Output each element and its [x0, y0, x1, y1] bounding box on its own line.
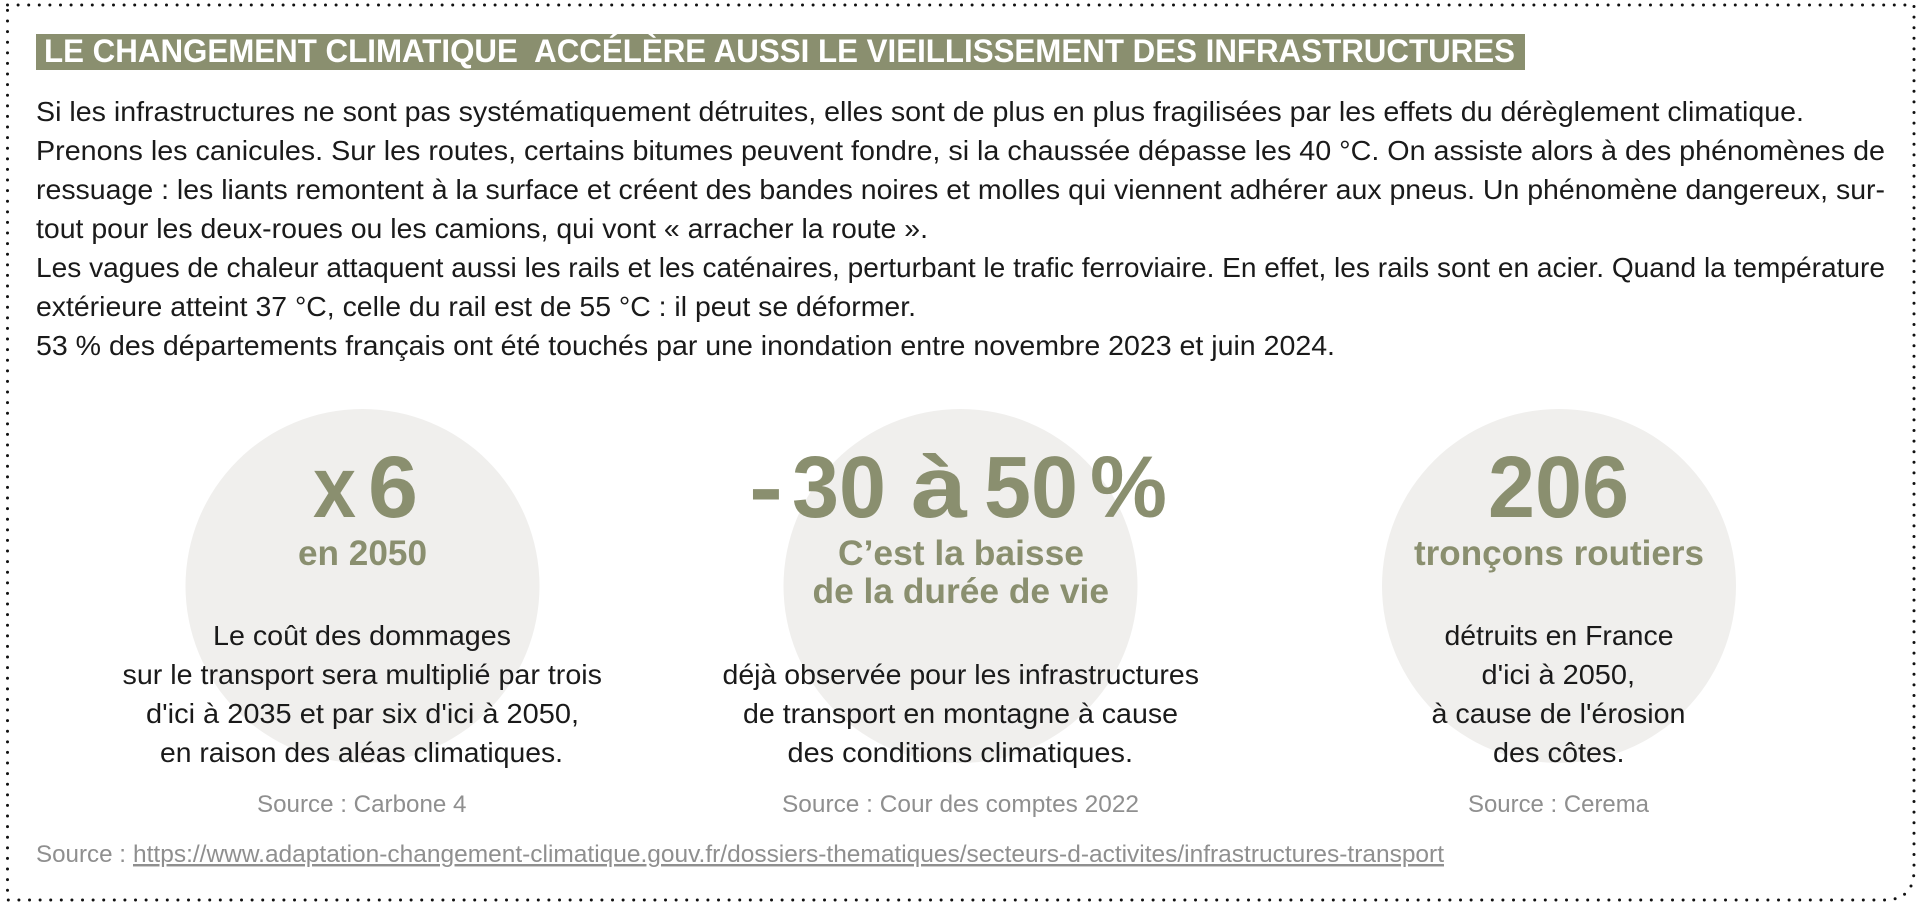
big number: -30 à 50 %: 30: [792, 439, 886, 536]
big number: -30 à 50 %: à: [911, 439, 968, 536]
description: road sections: à cause de l'érosion: [1432, 698, 1686, 729]
description: lifespan: des conditions climatiques.: [788, 737, 1133, 768]
description: road sections: des côtes.: [1493, 737, 1624, 768]
big number: x6: x: [313, 439, 356, 536]
subheading: baisse de la durée de vie: de la durée de vie: [812, 571, 1109, 611]
circle: lifespan stat background: [784, 409, 1138, 763]
intro text block: tout pour les deux-roues ou les camions, qui vont « arracher la route ».: [36, 213, 928, 244]
intro text block: 53 % des départements français ont été touchés par une inondation entre novembre 2023 et juin 2024.: [36, 330, 1335, 361]
description: road sections: détruits en France: [1444, 620, 1674, 651]
description: cost: [122, 620, 602, 768]
source: Carbone 4: Source : Carbone 4: [257, 791, 466, 818]
intro text block: [36, 96, 1885, 361]
subheading: baisse de la durée de vie: [812, 533, 1109, 611]
big number: x6: 6: [368, 439, 418, 536]
panel: road sections stat: [1382, 409, 1736, 818]
description: cost: en raison des aléas climatiques.: [160, 737, 563, 768]
subheading: baisse de la durée de vie: C’est la baisse: [838, 533, 1084, 573]
intro text block: Prenons les canicules. Sur les routes, certains bitumes peuvent fondre, si la chaussée dépasse les 40 °C. On assiste alors à des phénomènes de: [36, 135, 1885, 166]
description: road sections: [1432, 620, 1686, 768]
intro text block: ressuage : les liants remontent à la surface et créent des bandes noires et molles qui viennent adhérer aux pneus. Un phénomène dangereux, sur-: [36, 174, 1885, 205]
big number: 206: 206: [1488, 439, 1629, 536]
intro text block: Les vagues de chaleur attaquent aussi les rails et les caténaires, perturbant le trafic ferroviaire. En effet, les rails sont en acier. Quand la température: [36, 252, 1885, 283]
circle: road sections background: [1382, 409, 1736, 763]
panel: lifespan stat: [722, 409, 1199, 818]
panel: cost stat: [122, 409, 602, 818]
description: cost: d'ici à 2035 et par six d'ici à 2050,: [146, 698, 579, 729]
footer source: https://www.adaptation-changement-climatique.gouv.fr/dossiers-thematiques/secteurs-d-activites/infrastructures-transport: [133, 841, 1444, 868]
description: lifespan: de transport en montagne à cause: [743, 698, 1178, 729]
subheading: tronçons routiers: tronçons routiers: [1414, 533, 1704, 573]
description: cost: Le coût des dommages: [213, 620, 511, 651]
big number: x6: [313, 439, 418, 536]
subheading: en 2050: en 2050: [298, 533, 427, 573]
footer source: Source :: [36, 841, 126, 868]
big number: -30 à 50 %: [749, 439, 1167, 536]
big number: -30 à 50 %: %: [1090, 439, 1167, 536]
intro text block: extérieure atteint 37 °C, celle du rail est de 55 °C : il peut se déformer.: [36, 291, 916, 322]
description: cost: sur le transport sera multiplié par trois: [122, 659, 602, 690]
intro text block: Si les infrastructures ne sont pas systématiquement détruites, elles sont de plus en plus fragilisées par les effets du dérèglement climatique.: [36, 96, 1804, 127]
big number: -30 à 50 %: 50: [984, 439, 1078, 536]
title: LE CHANGEMENT CLIMATIQUE ACCÉLÈRE AUSSI LE VIEILLISSEMENT DES INFRASTRUCTURES: [44, 33, 1515, 69]
description: lifespan: déjà observée pour les infrastructures: [722, 659, 1199, 690]
source: Cour des comptes: Source : Cour des comptes 2022: [782, 791, 1139, 818]
description: lifespan: [722, 659, 1199, 768]
source: Cerema: Source : Cerema: [1468, 791, 1649, 818]
big number: -30 à 50 %: -: [749, 439, 783, 536]
circle: cost stat background: [186, 409, 540, 763]
description: road sections: d'ici à 2050,: [1482, 659, 1635, 690]
